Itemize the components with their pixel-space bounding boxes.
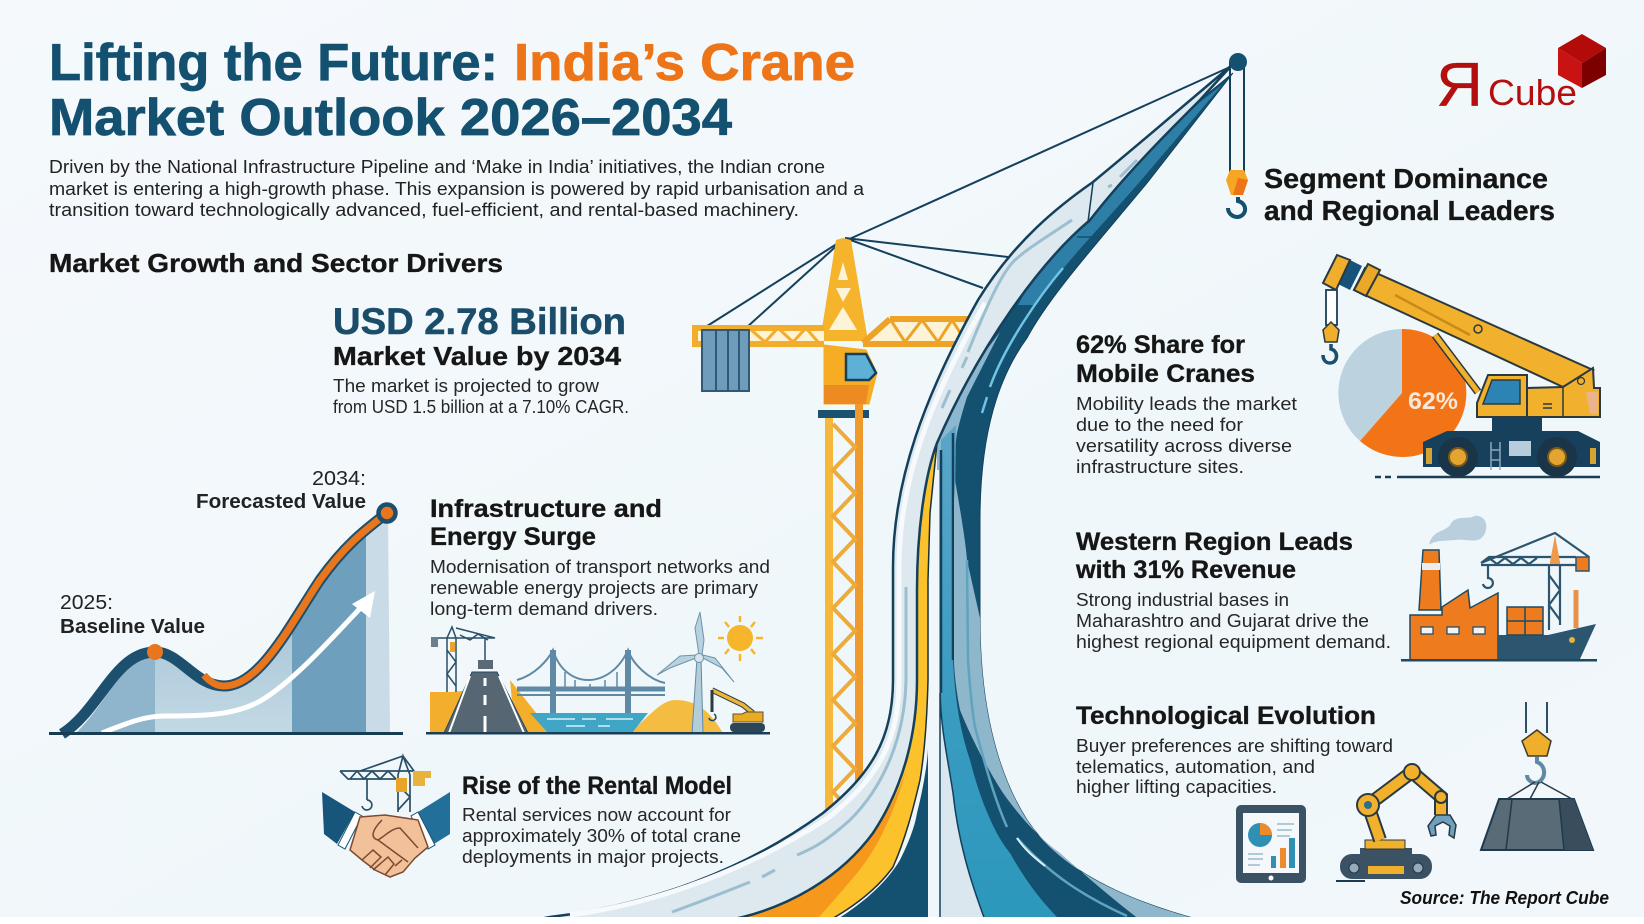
logo: Я (1436, 51, 1483, 120)
crane cables (704, 67, 1230, 328)
text block: mobile cranes: Mobile Cranes (1076, 360, 1255, 388)
icon: rental handshake (322, 756, 450, 877)
icon: mobile crane (1323, 255, 1600, 477)
orange wedge (735, 767, 907, 920)
bridge (517, 650, 665, 713)
intro paragraph: transition toward technologically advanced, fuel-efficient, and rental-based machinery. (49, 199, 799, 220)
factory building (1410, 590, 1498, 660)
right boom ribbon (937, 73, 1233, 920)
text block: western region: with 31% Revenue (1075, 556, 1296, 584)
logo (1436, 34, 1606, 120)
cargo boxes (1507, 607, 1543, 635)
text block: technology: Technological Evolution (1076, 702, 1376, 730)
peak marker (147, 644, 163, 660)
chart label 2025: Baseline Value (60, 616, 205, 638)
text block: infrastructure and energy (430, 495, 770, 619)
excavator (709, 690, 765, 732)
cab (824, 345, 877, 404)
chart label 2025: 2025: (60, 592, 113, 614)
pie chart 62 percent (1338, 329, 1466, 457)
area bands (75, 515, 390, 734)
boom cross line (1077, 236, 1100, 238)
rear body (1527, 368, 1600, 417)
title (49, 34, 855, 147)
chassis (1423, 431, 1600, 467)
stat: market value (333, 301, 629, 417)
text block: technology (1076, 702, 1393, 797)
white road (535, 65, 1232, 920)
text block: technology: telematics, automation, and (1076, 756, 1315, 777)
mini crane (340, 756, 414, 812)
road dashes (672, 160, 1137, 912)
text block: infrastructure and energy: Modernisation of transport networks and (430, 556, 770, 577)
road (444, 672, 528, 733)
chart label 2034: Forecasted Value (196, 491, 366, 513)
text block: rental model: approximately 30% of total crane (462, 825, 741, 846)
cab (1477, 375, 1527, 417)
heading: segment dominance: Segment Dominance (1264, 163, 1548, 194)
yellow band (735, 443, 937, 920)
intro paragraph: market is entering a high-growth phase. This expansion is powered by rapid urbanisation and a (49, 178, 865, 199)
text block: western region: Strong industrial bases in (1076, 589, 1289, 610)
text block: technology: higher lifting capacities. (1076, 776, 1277, 797)
ship hull (1498, 624, 1596, 659)
light blue band (954, 480, 1200, 920)
text block: western region (1075, 528, 1391, 652)
text block: western region: Western Region Leads (1076, 528, 1353, 556)
text block: western region: Maharashtro and Gujarat drive the (1076, 610, 1369, 631)
title: Market Outlook 2026–2034 (49, 89, 732, 147)
stat: market value: The market is projected to grow (333, 375, 600, 396)
boom blue strip (1018, 85, 1222, 305)
left cuff (322, 792, 355, 844)
strut (1435, 335, 1478, 392)
chart label 2034: 2034: (312, 468, 366, 490)
icon: infrastructure scene (426, 612, 770, 734)
boom head (1323, 255, 1350, 290)
text block: rental model: deployments in major projects. (462, 846, 724, 867)
light blue wedge (937, 332, 1000, 470)
growth chart (49, 468, 403, 735)
sand hills (430, 680, 552, 733)
text block: mobile cranes (1076, 331, 1297, 477)
chimney (1419, 550, 1441, 610)
text block: rental model: Rental services now account for (462, 804, 731, 825)
icon: factory and port (1401, 516, 1597, 662)
light strip (940, 693, 985, 920)
road edge highlight (570, 303, 985, 915)
sun (718, 616, 763, 661)
icon: tablet dashboard (1236, 805, 1306, 883)
text block: rental model: Rise of the Rental Model (462, 772, 732, 800)
text block: infrastructure and energy: long-term demand drivers. (430, 598, 658, 619)
port crane (1481, 533, 1589, 630)
chart label 2034 (196, 468, 366, 513)
text block: mobile cranes: versatility across diverse (1076, 435, 1292, 456)
text block: rental model (462, 772, 741, 867)
right cuff (418, 792, 450, 844)
icon: robotic arm (1336, 764, 1456, 881)
arm (1368, 772, 1441, 840)
factory ground (1401, 659, 1597, 662)
white growth arrow (102, 591, 375, 733)
intro paragraph (49, 156, 865, 220)
hands (350, 815, 428, 877)
ground line (1375, 476, 1600, 478)
text block: infrastructure and energy: Infrastructure and (430, 495, 662, 523)
teal band (941, 425, 1060, 920)
band highlights (967, 560, 1127, 916)
stat: market value: USD 2.78 Billion (333, 301, 626, 342)
text block: technology: Buyer preferences are shifting toward (1076, 735, 1393, 756)
heading: segment dominance: and Regional Leaders (1264, 195, 1555, 226)
logo: Cube (1488, 72, 1577, 113)
text block: mobile cranes: infrastructure sites. (1076, 456, 1244, 477)
text block: mobile cranes: 62% Share for (1076, 331, 1245, 359)
axis (49, 732, 403, 735)
text block: infrastructure and energy: renewable energy projects are primary (430, 577, 759, 598)
chart label 2025 (60, 592, 205, 638)
tracks (1340, 854, 1432, 879)
text block: western region: highest regional equipment demand. (1076, 631, 1391, 652)
stat: market value: from USD 1.5 billion at a 7.10% CAGR. (333, 396, 629, 417)
intro paragraph: Driven by the National Infrastructure Pipeline and ‘Make in India’ initiatives, the Indian crone (49, 156, 825, 177)
smoke (1429, 516, 1486, 545)
bottom edge strip (0, 917, 1644, 924)
text block: infrastructure and energy: Energy Surge (430, 523, 596, 551)
tower crane (692, 67, 1230, 838)
small crane (432, 627, 495, 692)
section heading: market growth: Market Growth and Sector Drivers (49, 248, 503, 278)
icon: hook and load (1481, 702, 1593, 850)
left road ribbon (535, 65, 1232, 920)
water (530, 713, 648, 733)
wind turbine (657, 612, 734, 733)
pie chart 62 percent: 62% (1408, 388, 1458, 415)
title: India’s Crane (514, 34, 855, 92)
cyan highlight (982, 268, 1063, 413)
heading: segment dominance (1264, 163, 1555, 226)
crane and road illustration (535, 65, 1233, 920)
mast (825, 418, 833, 838)
gripper (1428, 815, 1456, 838)
text block: mobile cranes: Mobility leads the market (1076, 393, 1297, 414)
title: Lifting the Future: (49, 34, 498, 92)
text block: mobile cranes: due to the need for (1076, 414, 1243, 435)
boom vertical joint (1088, 183, 1093, 222)
wheels (1438, 437, 1577, 477)
navy wedge (836, 747, 928, 920)
apex and hook (1226, 53, 1248, 217)
end marker (378, 504, 396, 522)
curve line (62, 513, 387, 734)
stat: market value: Market Value by 2034 (333, 341, 622, 371)
source note: Source: The Report Cube (1400, 888, 1609, 908)
ground (426, 732, 770, 734)
boom (1354, 268, 1593, 387)
navy body (937, 73, 1233, 920)
rope and hook (1326, 290, 1337, 325)
